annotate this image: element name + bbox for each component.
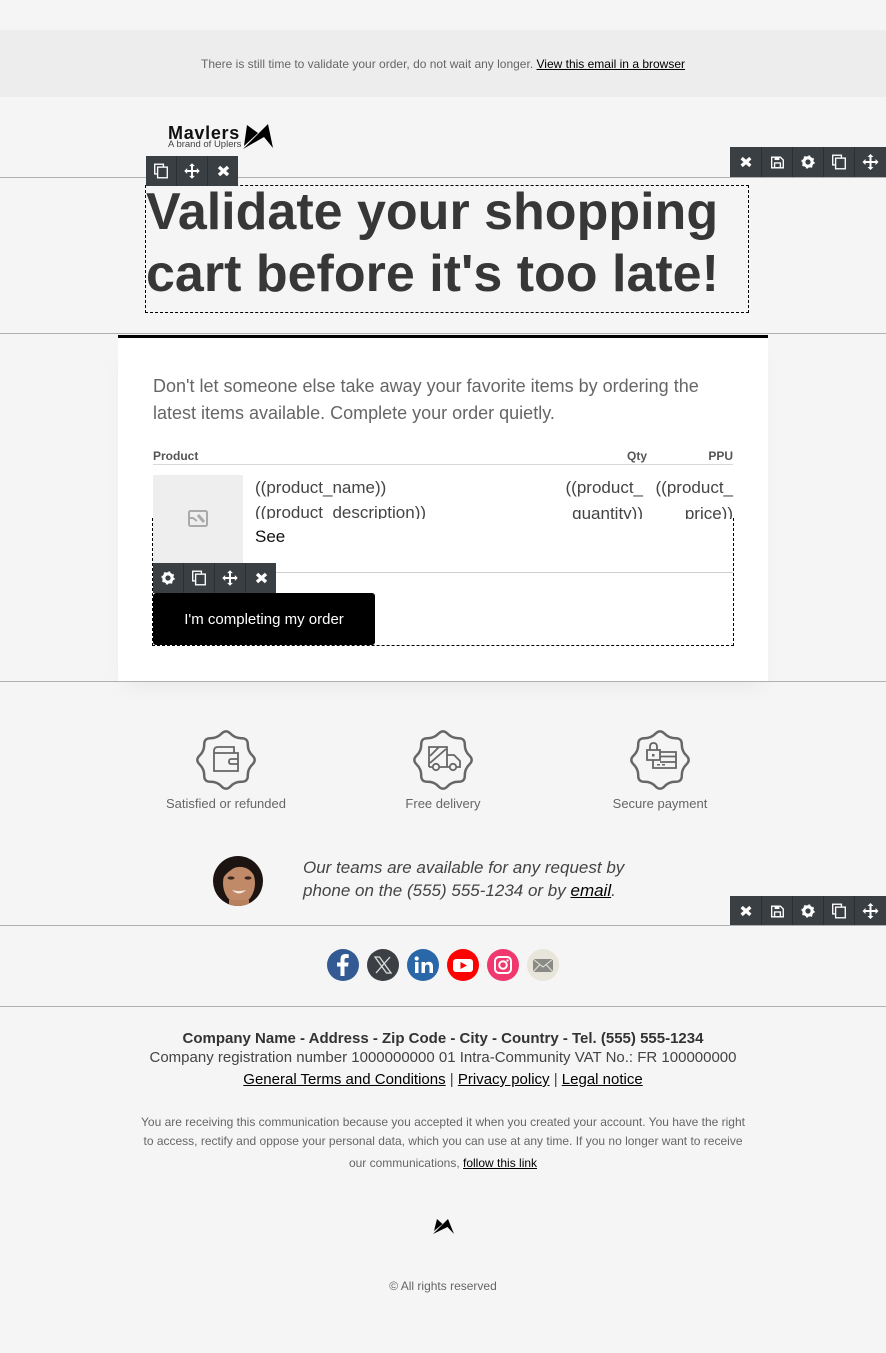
- label: secure payment: Secure payment: [613, 796, 707, 811]
- icon: email: [527, 949, 559, 981]
- see link: See: [255, 527, 285, 546]
- footer: disclaimer: You are receiving this communication because you accepted it when you created your account. You have the right: [141, 1115, 745, 1129]
- footer: disclaimer: [141, 1115, 745, 1170]
- table header: product: Product: [153, 449, 198, 463]
- button: complete order: I'm completing my order: [184, 611, 344, 628]
- logo: Mavlers: [168, 123, 273, 150]
- footer: registration: Company registration number 1000000000 01 Intra-Community VAT No.: FR 100000000: [150, 1049, 736, 1066]
- logo tagline: A brand of Uplers: [168, 139, 241, 150]
- product price: price)): [685, 504, 733, 523]
- icon: facebook: [327, 949, 359, 981]
- block selection outline: [152, 518, 734, 646]
- heading selection outline: [145, 185, 749, 313]
- product image placeholder: [153, 475, 243, 565]
- icon: instagram: [487, 949, 519, 981]
- avatar: support agent: [213, 856, 263, 906]
- icon: secure payment badge: [630, 730, 690, 790]
- table header: price: PPU: [708, 449, 733, 463]
- product description: ((product_description)): [255, 503, 426, 522]
- product name: ((product_name)): [255, 478, 386, 497]
- logo wordmark: Mavlers: [168, 123, 240, 143]
- button: complete order: [153, 593, 375, 645]
- intro text: latest items available. Complete your order quietly.: [153, 403, 555, 423]
- label: satisfied or refunded: Satisfied or refunded: [166, 796, 286, 811]
- logo mark: [243, 124, 273, 149]
- table header: quantity: Qty: [627, 449, 647, 463]
- preheader text: There is still time to validate your order, do not wait any longer. View this email in a browser: [201, 57, 685, 71]
- panel: order card: [118, 335, 768, 681]
- product quantity: [566, 478, 644, 523]
- icon: image placeholder: [188, 510, 208, 527]
- intro text: [153, 376, 699, 423]
- heading: Validate your shopping: [146, 183, 718, 241]
- heading: cart before it's too late!: [146, 245, 719, 303]
- footer logo mark: [433, 1219, 454, 1234]
- footer: disclaimer: our communications, follow this link: [349, 1156, 537, 1170]
- right toolbar top: [730, 147, 886, 177]
- copyright: © All rights reserved: [389, 1279, 497, 1293]
- product price: [656, 478, 734, 523]
- footer: disclaimer: to access, rectify and oppose your personal data, which you can use at any time. If you no longer want to receive: [143, 1134, 742, 1148]
- contact text: [302, 858, 625, 900]
- block cover: [243, 519, 734, 572]
- icon: youtube: [447, 949, 479, 981]
- block toolbar: [153, 563, 276, 593]
- social icons: [327, 949, 559, 981]
- label: free delivery: Free delivery: [405, 796, 481, 811]
- contact text: Our teams are available for any request by: [303, 858, 624, 877]
- heading: [146, 183, 719, 303]
- product quantity: ((product_: [566, 478, 643, 497]
- product quantity: quantity)): [572, 504, 643, 523]
- product price: ((product_: [656, 478, 733, 497]
- intro text: Don't let someone else take away your favorite items by ordering the: [153, 376, 699, 396]
- icon: delivery truck badge: [413, 730, 473, 790]
- icon: wallet badge: [196, 730, 256, 790]
- footer: legal links: General Terms and Conditions | Privacy policy | Legal notice: [243, 1071, 643, 1088]
- icon: linkedin: [407, 949, 439, 981]
- heading toolbar: [146, 156, 238, 186]
- footer: company name: Company Name - Address - Zip Code - City - Country - Tel. (555) 555-1234: [183, 1030, 703, 1047]
- preheader band: [0, 30, 886, 97]
- icon: X: [367, 949, 399, 981]
- contact text: phone on the (555) 555-1234 or by email.: [303, 881, 616, 900]
- right toolbar bottom: [730, 896, 886, 926]
